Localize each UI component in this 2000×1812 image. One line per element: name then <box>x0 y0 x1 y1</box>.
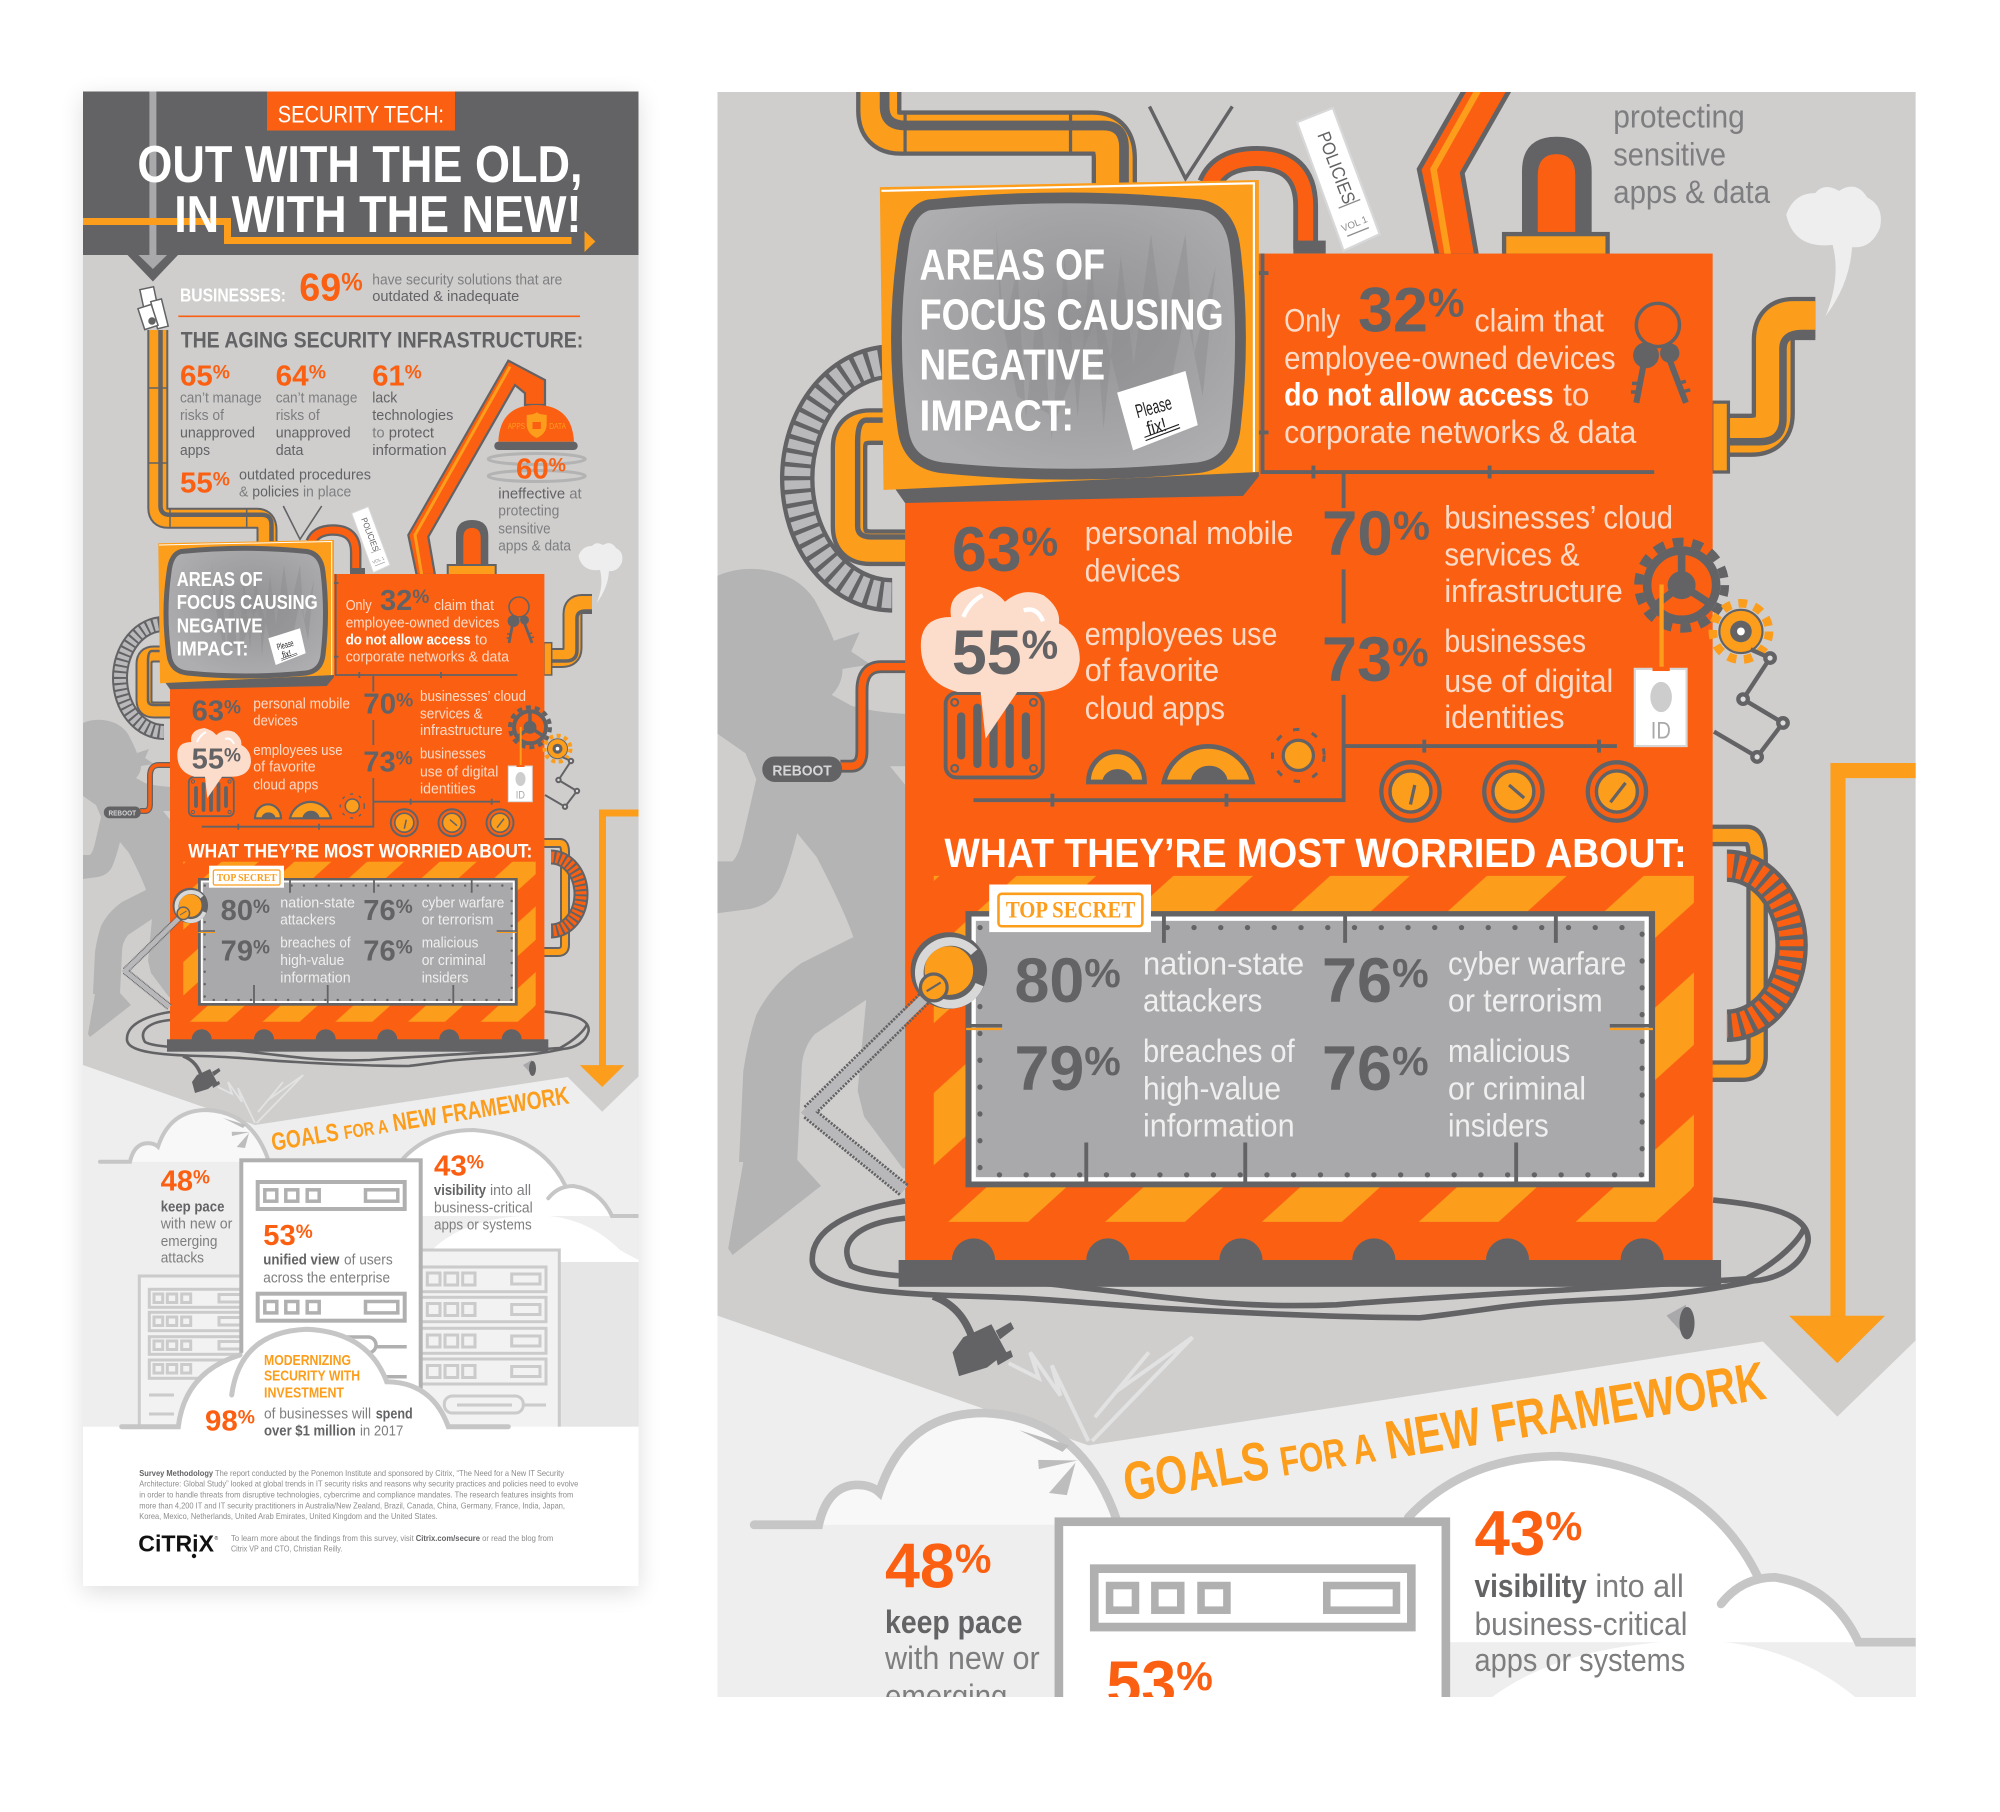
stat 70%: % <box>396 690 413 711</box>
zoom: stat 32%: do not allow access <box>1284 377 1554 413</box>
stat 60%: 60 <box>516 453 548 485</box>
lamp labels: DATA <box>549 422 567 431</box>
cables <box>127 1012 589 1078</box>
zoom: TV heading: NEGATIVE <box>920 342 1105 390</box>
zoom: stat 43%: apps or systems <box>1475 1642 1685 1678</box>
orange divider <box>178 316 580 317</box>
lamp arm <box>408 361 545 575</box>
stat 98%: over $1 million <box>264 1423 356 1440</box>
round gauges <box>391 809 514 836</box>
hazard stripes <box>183 861 536 1022</box>
zoom: stat 43%: 43 <box>1475 1499 1544 1569</box>
businesses stat: outdated & inadequate <box>372 288 519 305</box>
zoom: stat 76% cyber <box>1322 945 1626 1018</box>
zoom: sticky note text: fix! <box>1144 414 1169 440</box>
zoom: stat 48%: emerging <box>885 1678 1007 1714</box>
zoom: heading goals: GOALS FOR A NEW FRAMEWORK <box>1119 1351 1770 1513</box>
title: IN WITH THE NEW! <box>174 186 581 244</box>
zoom: stat 70%: % <box>1393 503 1430 549</box>
top secret stamp: TOP SECRET <box>217 873 277 884</box>
amber down arrow <box>580 810 639 1087</box>
icon: small amber gear <box>544 736 570 762</box>
left coil hose <box>120 624 164 732</box>
zoom: stat 76% insiders <box>1322 1033 1586 1144</box>
stat 73%: 73 <box>363 747 396 779</box>
zoom: stat 76% insiders: % <box>1392 1038 1429 1084</box>
zoom: sticky note text: Please <box>1133 392 1174 423</box>
icon: vent <box>189 777 234 816</box>
red bulb beacon <box>448 520 496 575</box>
stat 73% <box>363 745 498 797</box>
zoom: stat 79%: % <box>1084 1038 1121 1084</box>
zoom: stat 32% <box>1284 275 1637 450</box>
zoom: volume label: VOL 1 <box>1340 214 1369 235</box>
policies book <box>352 507 390 573</box>
stat 43%: apps or systems <box>434 1216 532 1233</box>
zoom: 60% caption: sensitive <box>1613 136 1726 173</box>
stat 64%: risks of <box>276 407 320 424</box>
zoom: stat 55%: % <box>1022 622 1058 668</box>
TV heading <box>177 569 318 661</box>
stat 70%: businesses’ cloud <box>420 688 526 705</box>
stat 76% insiders <box>363 935 486 986</box>
zoom: stat 73%: use of digital <box>1444 663 1613 699</box>
stat 55% cloud apps: of favorite <box>253 759 316 776</box>
zoom: stat 80%: nation-state <box>1143 945 1304 981</box>
TV heading: AREAS OF <box>177 569 263 591</box>
stat 53%: across the enterprise <box>263 1269 390 1286</box>
investment cloud <box>122 1329 508 1428</box>
force rings around 60% <box>488 454 585 482</box>
stat 60%: apps & data <box>498 538 572 555</box>
stat 43%: into all <box>490 1182 531 1199</box>
zoom: stat 76% cyber: 76 <box>1322 946 1392 1016</box>
stat 79%: high-value <box>280 952 344 969</box>
stat 80%: % <box>253 897 270 918</box>
zoom: stat 79%: 79 <box>1014 1034 1084 1104</box>
stat 65%: 65 <box>180 361 212 393</box>
heading: goals: GOALS FOR A NEW FRAMEWORK <box>269 1082 571 1157</box>
businesses stat: have security solutions that are <box>372 271 562 288</box>
zoom: stat 73%: businesses <box>1444 623 1586 659</box>
stat 32%: % <box>412 587 429 608</box>
sticky note text: fix! <box>281 648 292 660</box>
steam puff <box>578 543 622 603</box>
zoom: stat 55% <box>952 616 1277 726</box>
stat 55% outdated procedures: % <box>213 470 230 491</box>
icon: money bills <box>138 287 168 330</box>
stat 98%: in 2017 <box>360 1423 403 1440</box>
stat 60%: ineffective at <box>498 485 583 502</box>
stat 55% cloud apps <box>192 742 343 793</box>
title: SECURITY TECH: <box>278 102 444 128</box>
stat 64%: % <box>309 363 326 384</box>
stat 48% <box>160 1166 232 1267</box>
zoom: stat 79%: information <box>1143 1108 1295 1144</box>
investment heading: INVESTMENT <box>264 1384 344 1401</box>
goals clouds <box>100 1110 639 1430</box>
stat 61%: lack <box>372 390 398 407</box>
heading: worried: WHAT THEY’RE MOST WORRIED ABOUT: <box>188 842 532 863</box>
stat 55% cloud apps: cloud apps <box>253 776 318 793</box>
zoom: 60% caption: apps & data <box>1613 174 1771 210</box>
zoom: stat 43%: into all <box>1595 1568 1684 1604</box>
stat 65%: % <box>213 363 230 384</box>
survey methodology footnote <box>139 1468 579 1521</box>
half dial gauges <box>255 802 331 818</box>
stat 53%: unified view <box>263 1251 340 1268</box>
zoom: stat 76% insiders: insiders <box>1448 1108 1549 1144</box>
zoom: stat 48%: 48 <box>885 1531 955 1602</box>
learn more note: To learn more about the findings from this survey, visit Citrix.com/secure or read the blog from <box>231 1533 553 1543</box>
logo: Citrix: ® <box>214 1535 218 1542</box>
zoom: stat 48%: keep pace <box>885 1604 1022 1640</box>
zoom: stat 80%: % <box>1084 950 1121 996</box>
stat 64% <box>276 361 357 459</box>
icon: ID badge <box>508 727 532 802</box>
lamp dome <box>494 405 578 450</box>
ID label: ID <box>516 789 525 801</box>
reboot tag <box>104 806 141 818</box>
zoom: stat 76% cyber: cyber warfare <box>1448 945 1626 981</box>
stat 32%: do not allow access <box>346 631 471 648</box>
stat 48%: with new or <box>160 1215 232 1232</box>
zoom: stat 43%: business-critical <box>1475 1606 1687 1642</box>
zoom: stat 48%: % <box>955 1535 991 1581</box>
sticky note text <box>276 638 297 661</box>
stat 32% <box>346 585 510 666</box>
zoom: stat 48%: with new or <box>884 1640 1040 1676</box>
pipe: left bracket <box>144 651 172 710</box>
zoom: stat 73%: 73 <box>1322 625 1392 695</box>
light wedge behind goals <box>83 1065 639 1430</box>
stat 53%: of users <box>344 1251 393 1268</box>
stat 65%: unapproved <box>180 424 255 441</box>
stat 43%: business-critical <box>434 1200 533 1217</box>
policies label: POLICIES <box>359 516 381 553</box>
zoom: stat 55%: employees use <box>1085 616 1277 652</box>
zoom: stat 55%: cloud apps <box>1085 690 1225 726</box>
zoom: stat 80% <box>1014 945 1304 1018</box>
stat 76% cyber: % <box>396 897 413 918</box>
stat 64%: unapproved <box>276 424 351 441</box>
zoom: stat 70%: services & <box>1444 537 1580 573</box>
stat 79%: % <box>253 938 270 959</box>
magnified detail panel <box>717 0 1917 1812</box>
zoom: stat 73% <box>1322 623 1613 735</box>
businesses stat: BUSINESSES: <box>180 286 286 306</box>
businesses stat: 69 <box>299 267 343 310</box>
stat 70%: infrastructure <box>420 722 503 739</box>
icon: large gear <box>510 707 550 747</box>
pipe: left amber pipe down to TV <box>148 330 272 546</box>
businesses stat: % <box>341 269 363 297</box>
stat 60%: % <box>549 455 566 476</box>
survey methodology footnote: more than 4,200 IT and IT security practitioners in Australia/New Zealand, Brazil, Canada, China, Germany, France, India, Japan, <box>139 1500 565 1510</box>
stat 70%: services & <box>420 705 483 722</box>
stat 76% insiders: 76 <box>363 936 396 968</box>
stat 76% insiders: or criminal <box>422 952 486 969</box>
stat 53%: % <box>296 1222 313 1243</box>
stat 70% <box>363 688 526 739</box>
stat 63%: devices <box>253 713 298 730</box>
zoom: stat 76% insiders: or criminal <box>1448 1070 1586 1106</box>
zoom: stat 79%: high-value <box>1143 1070 1281 1106</box>
stat 98%: 98 <box>205 1406 237 1438</box>
power plug <box>192 1068 220 1093</box>
survey methodology footnote: in order to handle threats from disruptive technologies, cybercrime and compliance mandates. The research features insights from <box>139 1490 573 1500</box>
stat 55% cloud apps: % <box>224 745 241 766</box>
zoom: stat 80%: attackers <box>1143 982 1262 1018</box>
zoom: stat 79%: breaches of <box>1143 1033 1296 1069</box>
stat 76% cyber: 76 <box>363 895 396 927</box>
TV set <box>158 540 334 689</box>
stat 53%: 53 <box>263 1220 296 1252</box>
stat 80%: 80 <box>221 895 253 927</box>
zoom: TV heading: AREAS OF <box>920 241 1105 290</box>
stat 63%: % <box>224 698 241 719</box>
machine body <box>170 574 544 1040</box>
stat 76% insiders: insiders <box>422 969 468 986</box>
pipe: arch behind TV <box>311 530 356 572</box>
zoom: stat 55%: 55 <box>952 618 1021 688</box>
stat 61%: % <box>405 363 422 384</box>
stat 76% cyber <box>363 894 504 928</box>
zoom: stat 48% <box>884 1531 1040 1714</box>
zoom: reboot label: REBOOT <box>772 762 832 779</box>
sun dial <box>340 794 364 818</box>
zoom: stat 32%: % <box>1428 279 1464 325</box>
stat 79%: information <box>280 969 351 986</box>
reboot label: REBOOT <box>108 810 137 817</box>
learn more note <box>231 1533 553 1554</box>
stat 80%: nation-state <box>280 894 355 911</box>
background silhouette <box>83 720 172 1037</box>
stat 60%: sensitive <box>498 520 551 537</box>
stat 55% cloud apps: 55 <box>192 743 224 775</box>
zoom: stat 32%: claim that <box>1475 302 1604 338</box>
stat 55% outdated procedures: outdated procedures <box>239 466 371 483</box>
cloud: 55% <box>177 728 251 798</box>
TV heading: FOCUS CAUSING <box>177 592 318 614</box>
machine base with feet <box>167 1029 548 1052</box>
zoom: stat 43%: % <box>1545 1503 1582 1549</box>
survey methodology footnote: Survey Methodology The report conducted by the Ponemon Institute and sponsored by Citrix, “The Need for a New IT Security <box>139 1468 565 1478</box>
stat 32%: corporate networks & data <box>346 649 510 666</box>
stat 43%: % <box>467 1153 484 1174</box>
investment heading: SECURITY WITH <box>264 1368 360 1385</box>
stat 55% outdated procedures: 55 <box>180 468 212 500</box>
icon: keys <box>506 597 534 643</box>
lamp labels: APPS <box>508 422 525 431</box>
stat 65%: risks of <box>180 407 225 424</box>
zoom: stat 63%: 63 <box>952 515 1021 585</box>
stat 98%: of businesses will <box>264 1405 371 1422</box>
stat 79% <box>221 935 351 986</box>
stat 53% <box>263 1220 393 1286</box>
robot chain arm <box>545 757 579 809</box>
stat 73%: % <box>396 749 413 770</box>
central server <box>241 1160 421 1435</box>
zoom: stat 63%: personal mobile <box>1085 515 1293 551</box>
zoom: stat 53%: % <box>1176 1653 1213 1699</box>
zoom: stat 43%: visibility <box>1475 1568 1587 1604</box>
TV heading: IMPACT: <box>177 639 248 661</box>
arrow: grey down arrow from header <box>128 255 178 282</box>
right coil hose <box>544 843 581 952</box>
stat 32%: claim that <box>434 597 495 614</box>
zoom: 60% caption: protecting <box>1613 98 1745 134</box>
antenna <box>283 506 322 539</box>
stat 65%: apps <box>180 442 210 459</box>
stat 98%: spend <box>376 1405 413 1422</box>
zoom: stat 73%: identities <box>1444 699 1564 735</box>
volume label: VOL 1 <box>372 555 386 565</box>
stat 48%: keep pace <box>161 1199 224 1216</box>
stat 80% <box>221 894 355 928</box>
stat 64%: data <box>276 442 304 459</box>
zoom: stat 63%: % <box>1022 519 1058 565</box>
stat 73%: businesses <box>420 745 486 762</box>
zoom: stat 32%: Only <box>1284 302 1341 338</box>
zoom: stat 43% <box>1475 1499 1687 1678</box>
zoom: stat 63%: devices <box>1085 553 1180 589</box>
sticky note text: Please <box>276 638 295 652</box>
zoom: stat 76% insiders: 76 <box>1322 1034 1392 1104</box>
zoom: stat 70%: infrastructure <box>1444 573 1623 609</box>
survey methodology footnote: Architecture: Global Study” looked at global trends in IT security risks and reasons why security practices and policies need to evolve <box>139 1479 579 1489</box>
stat 61%: 61 <box>372 361 405 393</box>
survey methodology footnote: Korea, Mexico, Netherlands, United Arab Emirates, United Kingdom and the United States. <box>139 1511 438 1521</box>
stat 63%: 63 <box>192 696 224 728</box>
stat 63% <box>192 695 350 730</box>
stat 63%: personal mobile <box>253 695 350 712</box>
zoom: TV heading: FOCUS CAUSING <box>920 291 1224 339</box>
stat 65% <box>180 361 262 459</box>
stat 32%: employee-owned devices <box>346 614 499 631</box>
zoom: stat 32%: corporate networks & data <box>1284 414 1637 450</box>
zoom: stat 32%: employee-owned devices <box>1284 340 1616 376</box>
zoom: stat 63% <box>952 515 1293 589</box>
zoom: TV heading <box>920 241 1224 440</box>
zoom: top secret stamp: TOP SECRET <box>1006 898 1135 923</box>
zoom: stat 73%: % <box>1392 629 1429 675</box>
title <box>137 102 582 244</box>
stat 61% <box>372 361 453 459</box>
investment heading: MODERNIZING <box>264 1352 351 1369</box>
stat 98%: % <box>238 1408 255 1429</box>
stat 61%: information <box>372 442 447 459</box>
left server rack <box>138 1274 240 1424</box>
stat 48%: 48 <box>161 1166 193 1198</box>
stat 43% <box>434 1151 533 1233</box>
stat 60% <box>498 453 583 555</box>
stat 76% insiders: malicious <box>422 935 478 952</box>
zoom: stat 76% cyber: % <box>1392 950 1429 996</box>
loose screw <box>523 1060 536 1076</box>
hook arm <box>125 914 183 1007</box>
zoom: stat 55%: of favorite <box>1085 652 1219 688</box>
stat 98% <box>205 1405 413 1440</box>
stat 43%: 43 <box>434 1151 466 1183</box>
header band <box>83 91 639 255</box>
zoom: sticky note text <box>1133 392 1179 442</box>
stat 32%: to <box>475 631 487 648</box>
logo: Citrix: CiTRiX <box>138 1531 215 1557</box>
zoom: stat 70% <box>1322 499 1673 609</box>
stat 79%: breaches of <box>280 935 351 952</box>
businesses stat <box>180 267 562 310</box>
stat 73%: use of digital <box>420 764 498 781</box>
reboot pipe <box>140 765 172 811</box>
poster artwork: left full infographic <box>83 91 639 1587</box>
zoom: policies label: POLICIES <box>1313 128 1360 207</box>
stat 80%: attackers <box>280 911 336 928</box>
zoom: stat 76% insiders: malicious <box>1448 1033 1570 1069</box>
zoom: ID label: ID <box>1651 718 1671 745</box>
stat 48%: emerging <box>161 1233 217 1250</box>
secret panel <box>198 866 518 1006</box>
stat 64%: can’t manage <box>276 390 357 407</box>
zoom: TV heading: IMPACT: <box>920 392 1074 440</box>
stat 61%: to protect <box>372 424 435 441</box>
footer white area <box>83 1427 639 1587</box>
zoom: stat 79% <box>1014 1033 1296 1144</box>
stat 61%: technologies <box>372 407 453 424</box>
stat 55% outdated procedures <box>180 466 371 501</box>
stat 76% cyber: or terrorism <box>422 911 493 928</box>
zoom: stat 53%: 53 <box>1106 1649 1176 1719</box>
stat 48%: attacks <box>161 1250 204 1267</box>
zoom: heading worried: WHAT THEY’RE MOST WORRIED ABOUT: <box>945 830 1687 876</box>
zoom: stat 70%: businesses’ cloud <box>1444 499 1673 535</box>
stat 76% cyber: cyber warfare <box>422 894 504 911</box>
stat 79%: 79 <box>221 936 253 968</box>
stat 65%: can’t manage <box>180 390 262 407</box>
stat 55% outdated procedures: & policies in place <box>239 484 351 501</box>
zoom: stat 32%: 32 <box>1358 275 1428 345</box>
stat 32%: Only <box>346 597 372 614</box>
stat 76% insiders: % <box>396 938 413 959</box>
stat 73%: identities <box>420 780 476 797</box>
stat 32%: 32 <box>380 585 412 617</box>
right server rack <box>412 1250 559 1435</box>
zoom: 60% caption <box>1613 98 1771 210</box>
zoom: stat 70%: 70 <box>1322 499 1392 569</box>
TV heading: NEGATIVE <box>177 615 263 637</box>
heading: aging infrastructure: THE AGING SECURITY INFRASTRUCTURE: <box>181 327 583 352</box>
sparks from plug <box>218 1075 303 1123</box>
investment heading <box>264 1352 360 1401</box>
machine divider lines <box>202 574 517 830</box>
zoom: stat 80%: 80 <box>1014 946 1084 1016</box>
stat 48%: % <box>193 1168 210 1189</box>
zoom: stat 76% cyber: or terrorism <box>1448 982 1603 1018</box>
lamp labels <box>508 422 567 431</box>
stat 60%: protecting <box>498 503 559 520</box>
stat 64%: 64 <box>276 361 308 393</box>
title: OUT WITH THE OLD, <box>137 136 582 194</box>
hook ring and bolt <box>176 891 205 921</box>
stat 43%: visibility <box>434 1182 487 1199</box>
stat 70%: 70 <box>363 688 396 720</box>
zoom: stat 32%: to <box>1563 377 1590 413</box>
learn more note: Citrix VP and CTO, Christian Reilly. <box>231 1544 342 1554</box>
left panel text <box>108 102 583 1558</box>
stat 55% cloud apps: employees use <box>253 742 343 759</box>
pipe: right amber pipe <box>548 604 592 661</box>
